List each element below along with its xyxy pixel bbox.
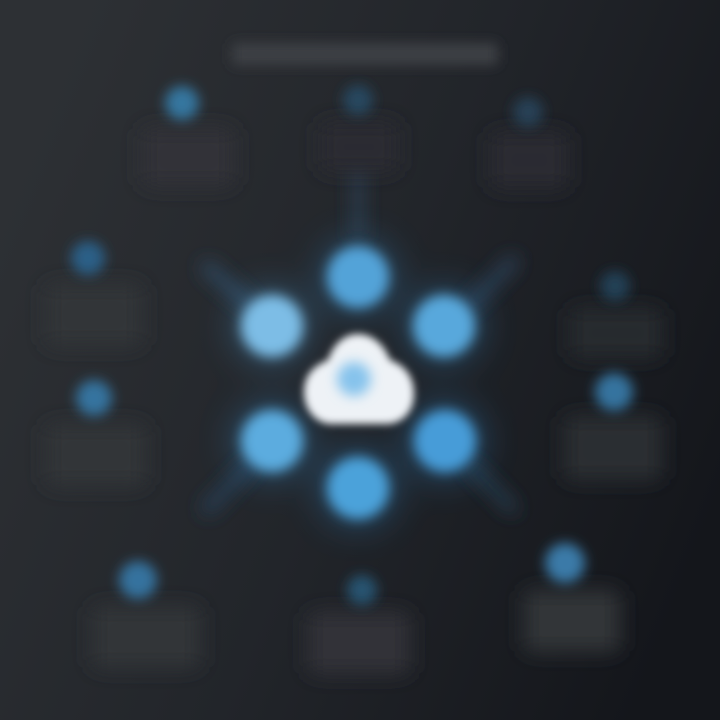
outer card: right lower: [564, 373, 662, 480]
icon: left upper node: [71, 241, 105, 275]
outer card: left upper: [46, 241, 142, 346]
node: upper right: [413, 295, 475, 357]
outer card: right upper: [570, 271, 662, 358]
title: [232, 43, 498, 65]
node: upper left: [241, 295, 303, 357]
outer card: left lower: [46, 380, 146, 486]
icon: bottom right node: [545, 543, 585, 583]
icon: right lower node: [595, 373, 633, 411]
outer card: top left: [142, 86, 234, 186]
icon: top centre node: [343, 85, 373, 115]
node: top: [327, 246, 389, 308]
icon: top right node: [513, 97, 543, 127]
cloud centre icon: [337, 362, 371, 396]
central cloud hub: [304, 334, 414, 424]
outer card: top right: [490, 97, 568, 188]
icon: top left node: [165, 86, 199, 120]
node glow: [234, 239, 483, 526]
outer card: bottom centre: [308, 575, 410, 674]
node: lower left: [241, 410, 303, 472]
outer card: bottom left: [92, 561, 200, 668]
node: lower right: [414, 410, 476, 472]
cloud body: [304, 334, 414, 424]
icon: bottom left node: [119, 561, 157, 599]
icon: right upper node: [600, 271, 630, 301]
icon: left lower node: [76, 380, 112, 416]
outer card: top centre: [320, 85, 398, 172]
icon: bottom centre node: [347, 575, 377, 605]
inner ring of glowing nodes: [234, 239, 483, 526]
node: bottom: [327, 457, 389, 519]
outer card: bottom right: [524, 543, 620, 652]
connector rays: [208, 165, 512, 508]
